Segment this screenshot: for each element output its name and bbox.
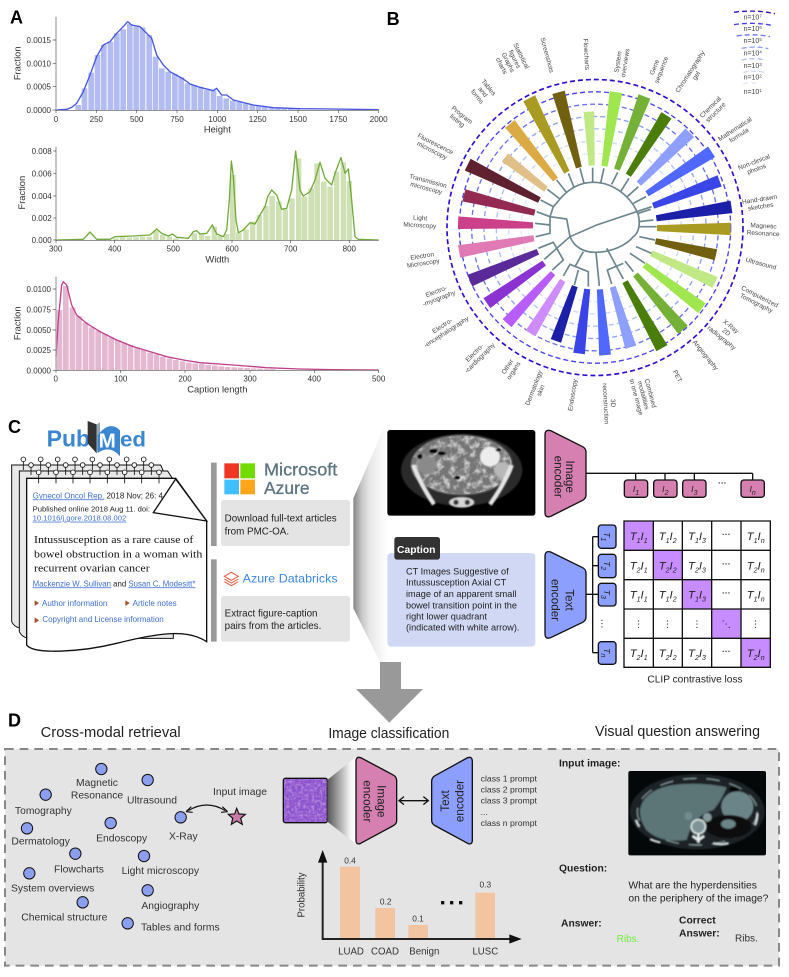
- caption box: [387, 537, 535, 647]
- dashed panel background: [5, 749, 779, 966]
- similarity matrix: ⋱: [722, 619, 731, 629]
- probability bar chart: LUAD: [338, 946, 364, 957]
- model answer: Answer:: [561, 918, 602, 929]
- category labels: radiography: [706, 325, 737, 352]
- category labels: Mathematical: [717, 116, 754, 143]
- separator bars: [211, 463, 217, 642]
- arrow: query to x-ray: [186, 805, 228, 812]
- chart: caption length histogram: 0.0100: [27, 285, 52, 294]
- similarity matrix: T1I2: [659, 531, 677, 545]
- similarity matrix: T2In: [747, 560, 765, 574]
- Microsoft Azure logo: Microsoft: [264, 460, 338, 480]
- chart: height histogram: 0.0010: [27, 59, 52, 68]
- chart: caption length histogram: 100: [114, 374, 128, 383]
- category labels: charts: [494, 57, 509, 76]
- probability bar chart: 0.1: [412, 914, 424, 924]
- point labels: [11, 778, 267, 933]
- caption box: bowel transition point in the: [406, 601, 517, 611]
- ring legend: [734, 11, 775, 96]
- probability bar chart: Benign: [409, 946, 439, 957]
- similarity matrix: T2In: [747, 648, 765, 662]
- panel letter D: D: [8, 710, 21, 730]
- category labels: 2D: [720, 327, 732, 338]
- chart: caption length histogram: 500: [372, 374, 386, 383]
- caption box: right lower quadrant: [406, 612, 487, 622]
- image embedding row: I2: [662, 484, 669, 497]
- text encoder: [432, 757, 472, 844]
- chart: caption length histogram: 0.0000: [27, 366, 52, 375]
- model answer: Ribs.: [617, 934, 639, 945]
- matrix caption: CLIP contrastive loss: [647, 675, 743, 686]
- zoom gradient funnel: [353, 420, 387, 677]
- category labels: and: [476, 86, 489, 99]
- chart: caption length histogram: Fraction: [12, 306, 22, 340]
- chart: height histogram: 0.0000: [27, 106, 52, 115]
- category labels: Hand-drawn: [742, 194, 778, 206]
- similarity matrix: T1In: [747, 590, 765, 603]
- category labels: modalities: [636, 380, 650, 411]
- category labels: Flowcharts: [582, 38, 590, 71]
- correct answer: Answer:: [679, 928, 720, 939]
- point labels: Tomography: [15, 806, 73, 817]
- chart: width histogram: 400: [108, 244, 122, 253]
- text embedding column: T 1: [599, 532, 612, 541]
- image classification group: [283, 757, 538, 957]
- question text: on the periphery of the image?: [628, 894, 769, 905]
- category labels: Microscopy: [403, 221, 437, 230]
- image embedding row: [586, 473, 764, 497]
- point labels: Light microscopy: [122, 866, 200, 877]
- image encoder: Image: [563, 460, 576, 493]
- point labels: Dermatology: [11, 837, 71, 848]
- text embedding column: ⋮: [597, 618, 607, 628]
- correct answer: Correct: [679, 915, 716, 926]
- category labels: Transmission: [409, 173, 448, 190]
- similarity matrix: T1I3: [688, 531, 706, 545]
- chart: caption length histogram: Caption length: [187, 385, 247, 395]
- image embedding row: I3: [691, 484, 698, 497]
- category labels: listing: [448, 113, 466, 129]
- probability bar chart: Probability: [296, 872, 307, 918]
- chart: height histogram: 500: [130, 115, 144, 124]
- article source group: [8, 417, 350, 651]
- category labels: microscopy: [416, 140, 449, 162]
- similarity matrix: ⋮: [692, 619, 702, 629]
- category labels: Electro-: [431, 317, 454, 335]
- chart: height histogram: 1250: [249, 115, 267, 124]
- similarity matrix: T2I3: [688, 648, 706, 662]
- point labels: Ultrasound: [127, 795, 177, 806]
- Microsoft Azure logo: Azure: [264, 478, 310, 498]
- category labels: Graphs: [500, 52, 516, 74]
- heading: cross-modal retrieval: Cross-modal retrieval: [41, 725, 181, 741]
- text encoder: encoder: [453, 780, 466, 822]
- category labels: Ultrasound: [745, 257, 777, 272]
- category labels: -encephalography: [423, 315, 471, 349]
- category labels: in one image: [628, 378, 644, 416]
- big down arrow: [356, 662, 423, 723]
- chart: height histogram: 2000: [370, 115, 388, 124]
- correct answer: [679, 915, 758, 945]
- panel B: circular taxonomy chart: [387, 9, 780, 425]
- text embedding column: [586, 525, 616, 664]
- panel A: size distributions: [10, 7, 388, 395]
- chart: width histogram: 0.006: [32, 170, 52, 179]
- chart: caption length histogram: 0.0050: [27, 326, 52, 335]
- CT image: [387, 430, 535, 516]
- category labels: figures: [507, 49, 522, 70]
- category labels: gel: [691, 70, 702, 82]
- text embedding column: T n: [599, 648, 612, 657]
- image encoder: Image: [375, 785, 388, 818]
- histology patch: [283, 778, 327, 823]
- category labels: Angiography: [691, 339, 720, 372]
- class prompts: [481, 774, 538, 828]
- PubMed logo: M: [99, 430, 116, 453]
- category labels: Statistical: [511, 42, 530, 71]
- probability bar chart: 0.4: [344, 855, 356, 865]
- extract step box: pairs from the articles.: [225, 621, 321, 632]
- article text: [33, 491, 203, 624]
- probability bar chart: COAD: [371, 946, 399, 957]
- article text: 10.1016/j.gore.2018.08.002: [33, 514, 126, 523]
- chart: caption length histogram: 200: [178, 374, 192, 383]
- article text: Article notes: [133, 599, 177, 608]
- probability bar chart: 0.3: [480, 879, 491, 889]
- chart: caption length histogram: 400: [308, 374, 322, 383]
- chart: width histogram: Fraction: [17, 176, 27, 210]
- chart: width histogram: [17, 147, 379, 265]
- point labels: Input image: [213, 787, 267, 798]
- ring legend: n=102: [744, 73, 762, 82]
- concentric count rings: [447, 80, 743, 376]
- caption box: Caption: [397, 545, 435, 556]
- extract step box: [221, 596, 350, 642]
- article text: Copyright and License information: [42, 615, 164, 624]
- similarity matrix: ···: [722, 646, 731, 656]
- text encoder: Text: [562, 589, 575, 611]
- model answer: [561, 918, 639, 945]
- article text: Author information: [42, 599, 107, 608]
- chart: width histogram: 700: [284, 244, 298, 253]
- similarity matrix: T2I2: [659, 648, 677, 662]
- similarity matrix: T1I2: [659, 590, 677, 603]
- ring legend: n=107: [744, 13, 762, 22]
- chart: width histogram: 0.004: [32, 192, 52, 201]
- category labels: Endoscopy: [567, 378, 579, 412]
- ring legend: n=103: [744, 62, 762, 70]
- category labels: [403, 37, 780, 425]
- image encoder: [356, 757, 397, 844]
- image encoder: encoder: [551, 456, 564, 498]
- text embedding column: T 2: [599, 561, 612, 570]
- download step box: [221, 500, 350, 546]
- question text: What are the hyperdensities: [628, 880, 757, 891]
- ring legend: n=105: [744, 37, 762, 45]
- extract step box: Extract figure-caption: [225, 608, 318, 619]
- similarity matrix: T1I1: [630, 531, 648, 545]
- chart: height histogram: 1750: [329, 115, 348, 124]
- Azure Databricks logo: Azure Databricks: [243, 571, 338, 585]
- similarity matrix: [624, 521, 770, 667]
- panel letter A: A: [10, 7, 23, 27]
- category labels: structure: [705, 101, 728, 124]
- similarity matrix: T1In: [747, 531, 765, 545]
- article text: Intussusception as a rare cause of: [34, 534, 194, 546]
- chart: width histogram: 800: [343, 244, 357, 253]
- image encoder: [545, 430, 586, 517]
- probability bar chart: LUSC: [472, 946, 498, 957]
- category labels: Tables: [479, 78, 497, 98]
- chart: width histogram: Width: [205, 255, 229, 265]
- chart: width histogram: 500: [167, 244, 181, 253]
- chart: width histogram: 0.008: [32, 147, 52, 156]
- article text: Mackenzie W. Sullivan and Susan C. Modesitt*: [33, 579, 195, 588]
- text encoder: [545, 552, 586, 638]
- point labels: Magnetic: [76, 778, 118, 789]
- ring legend: n=104: [744, 49, 762, 58]
- panel C: data collection pipeline: [8, 417, 770, 686]
- radial bars: [458, 91, 732, 356]
- ring legend: n=101: [744, 88, 762, 96]
- chart: height histogram: 0.0015: [27, 36, 52, 45]
- similarity matrix: ⋮: [634, 619, 643, 629]
- category labels: reconstruction: [601, 383, 610, 425]
- text encoder: Text: [439, 790, 452, 812]
- category labels: Electron: [410, 251, 435, 262]
- category labels: Combined: [643, 378, 657, 409]
- PubMed logo: Pub: [47, 425, 90, 451]
- article text: Published online 2018 Aug 11. doi:: [33, 505, 150, 514]
- caption box: image of an apparent small: [406, 589, 516, 599]
- image embedding row: In: [750, 484, 756, 497]
- point labels: X-Ray: [169, 831, 199, 842]
- category labels: photos: [746, 162, 768, 176]
- similarity matrix: T2I1: [630, 560, 648, 574]
- probability bar chart: 0.2: [380, 897, 392, 907]
- page fold: [153, 479, 207, 521]
- category labels: Resonance: [746, 229, 780, 238]
- chart: width histogram: 300: [49, 244, 63, 253]
- point labels: Chemical structure: [21, 912, 108, 923]
- category labels: Microscopy: [407, 258, 441, 270]
- category labels: Electro-: [425, 285, 448, 299]
- category labels: formula: [728, 127, 751, 145]
- caption box: (indicated with white arrow).: [406, 623, 519, 633]
- image embedding row: I1: [633, 484, 639, 497]
- chart: width histogram: 0.002: [32, 214, 52, 223]
- category labels: -myography: [422, 289, 457, 308]
- similarity matrix: T1I3: [688, 590, 706, 603]
- category labels: forms: [469, 88, 485, 106]
- panel letter B: B: [387, 9, 400, 29]
- question: Question:: [559, 864, 607, 875]
- chart: height histogram: 250: [90, 115, 104, 124]
- PubMed logo: [47, 421, 146, 456]
- similarity matrix: T2I1: [630, 648, 648, 662]
- category labels: PET: [671, 369, 683, 384]
- chart: height histogram: 0: [54, 115, 59, 124]
- download step box: Download full-text articles: [225, 514, 337, 525]
- chart: width histogram: 0.000: [32, 236, 52, 245]
- category labels: microscopy: [409, 181, 444, 196]
- icon: input star: [228, 808, 245, 824]
- similarity matrix: ···: [722, 558, 731, 568]
- category labels: System: [613, 51, 624, 73]
- chart: caption length histogram: 0.0025: [27, 346, 52, 355]
- probability bar chart: [296, 850, 522, 957]
- point labels: Endoscopy: [96, 834, 148, 845]
- point labels: Angiography: [141, 901, 200, 912]
- chart: height histogram: [12, 17, 388, 135]
- class prompts: class 3 prompt: [481, 795, 538, 805]
- category labels: Chromatography: [674, 49, 707, 94]
- chart: caption length histogram: 300: [243, 374, 257, 383]
- chart: height histogram: Fraction: [12, 46, 22, 80]
- download step box: from PMC-OA.: [225, 526, 289, 537]
- article text: bowel obstruction in a woman with: [34, 548, 203, 560]
- heading: visual question answering: Visual question answering: [595, 724, 760, 740]
- phylogenetic tree: [535, 168, 657, 287]
- similarity matrix: T1I1: [630, 590, 648, 603]
- Microsoft Azure logo: [224, 460, 338, 498]
- chart: height histogram: Height: [204, 125, 231, 135]
- similarity matrix: ···: [722, 588, 731, 598]
- panel D: applications: [5, 710, 779, 966]
- category labels: Light: [413, 215, 428, 222]
- chart: height histogram: 750: [170, 115, 184, 124]
- category labels: Fluorescence: [416, 132, 454, 157]
- category labels: sketches: [748, 202, 775, 213]
- chart: caption length histogram: 0: [53, 374, 58, 383]
- category labels: -cardiography: [464, 341, 497, 375]
- category labels: Other: [501, 358, 516, 376]
- category labels: Non-clinical: [737, 153, 772, 172]
- class prompts: class 2 prompt: [481, 785, 538, 795]
- chart: height histogram: 1000: [208, 115, 227, 124]
- chart: height histogram: 1500: [289, 115, 307, 124]
- similarity matrix: ⋮: [751, 619, 760, 629]
- category labels: skin: [536, 384, 547, 397]
- category labels: Gene: [649, 58, 661, 76]
- chart: caption length histogram: [12, 277, 386, 395]
- caption box: Intussusception Axial CT: [406, 578, 507, 588]
- point labels: System overviews: [11, 884, 94, 895]
- zoom funnel: [327, 757, 356, 844]
- question text: [628, 880, 769, 905]
- arrow: encoders: [399, 797, 428, 805]
- article text: Gynecol Oncol Rep. 2018 Nov; 26: 4: [33, 491, 164, 500]
- correct answer: Ribs.: [735, 934, 758, 945]
- chart: height histogram: 0.0005: [27, 83, 52, 92]
- class prompts: class n prompt: [481, 818, 538, 828]
- category labels: Tomography: [739, 292, 774, 315]
- category labels: Screenshots: [538, 37, 555, 74]
- chart: caption length histogram: 0.0075: [27, 306, 52, 315]
- image embedding row: ···: [718, 478, 727, 488]
- input image label: Input image:: [559, 758, 620, 769]
- text encoder: encoder: [549, 579, 562, 621]
- similarity matrix: T2I3: [688, 560, 706, 574]
- category labels: Computerized: [740, 285, 779, 310]
- retrieval scatter: [11, 763, 267, 933]
- CLIP training group: [387, 430, 770, 686]
- similarity matrix: T2I2: [659, 560, 677, 574]
- point labels: Resonance: [71, 790, 123, 801]
- image encoder: encoder: [360, 780, 373, 823]
- category labels: Electro-: [465, 343, 485, 364]
- article text: recurrent ovarian cancer: [34, 563, 150, 575]
- category labels: Chemical: [699, 95, 723, 120]
- caption box: CT Images Suggestive of: [406, 567, 509, 577]
- category labels: X-Ray: [721, 318, 740, 336]
- notepad pages: [12, 457, 207, 651]
- panel letter C: C: [8, 417, 21, 437]
- embedding points: [21, 763, 186, 929]
- class prompts: class 1 prompt: [481, 774, 538, 784]
- category labels: organs: [506, 360, 523, 381]
- point labels: Tables and forms: [141, 922, 220, 933]
- heading: image classification: Image classification: [328, 726, 449, 742]
- text embedding column: T 3: [599, 590, 612, 599]
- chart: width histogram: 600: [225, 244, 239, 253]
- visual question answering group: [559, 758, 769, 945]
- category labels: sequence: [654, 55, 670, 84]
- ring legend: n=106: [744, 25, 762, 33]
- PubMed logo: ed: [120, 427, 146, 451]
- liver CT image: [628, 771, 766, 855]
- category labels: Magnetic: [750, 222, 778, 231]
- category labels: Program: [450, 105, 473, 126]
- point labels: Flowcharts: [54, 864, 104, 875]
- similarity matrix: ···: [722, 529, 731, 539]
- category labels: overviews: [620, 48, 632, 78]
- category labels: 3D: [609, 399, 616, 408]
- similarity matrix: ⋮: [663, 619, 672, 629]
- class prompts: ...: [481, 807, 488, 817]
- category labels: Dermatology: [524, 369, 544, 407]
